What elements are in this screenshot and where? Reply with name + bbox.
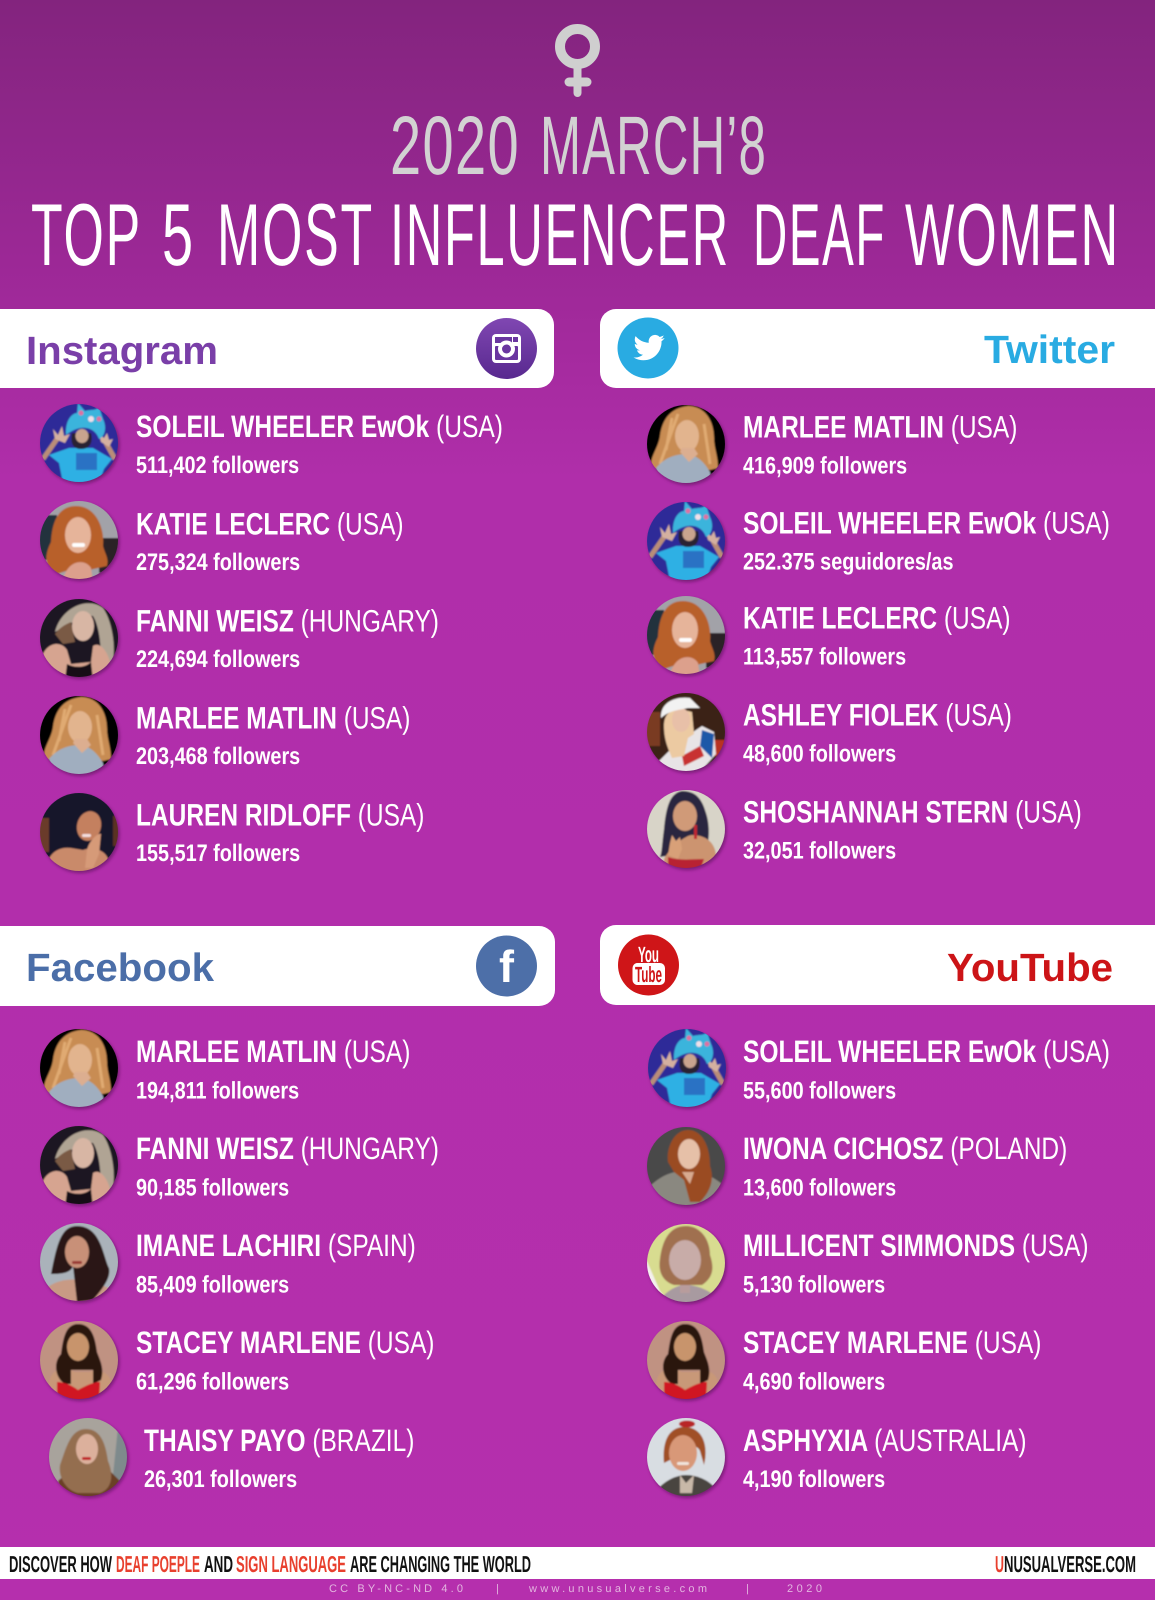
entry: Marlee Matlin: 194,811 followers	[136, 1078, 299, 1104]
Facebook banner	[0, 926, 555, 1006]
icon: YouTube	[618, 934, 679, 996]
entry: Lauren Ridloff	[39, 792, 424, 873]
entry: Marlee Matlin: MARLEE MATLIN (USA)	[136, 700, 410, 736]
entry: Fanni Weisz: 90,185 followers	[136, 1174, 289, 1202]
entry: Marlee Matlin	[646, 404, 1017, 486]
title: INFLUENCER	[390, 185, 730, 284]
credits line: |	[746, 1583, 749, 1595]
entry: Millicent Simmonds: 5,130 followers	[743, 1272, 885, 1298]
entry: Thaisy Payo: THAISY PAYO (BRAZIL)	[144, 1423, 414, 1458]
entry: Shoshannah Stern: SHOSHANNAH STERN (USA)	[743, 794, 1082, 830]
entry: Soleil Wheeler	[646, 501, 1110, 582]
entry: Katie Leclerc	[39, 500, 404, 582]
panel: YouTube	[600, 925, 1155, 1499]
entry: Marlee Matlin: MARLEE MATLIN (USA)	[743, 410, 1017, 444]
entry: Asphyxia	[646, 1417, 1027, 1499]
icon: YouTube: Tube	[635, 962, 662, 987]
entry: Thaisy Payo: 26,301 followers	[144, 1466, 297, 1493]
footer tagline: ARE CHANGING THE WORLD	[350, 1551, 531, 1577]
title: TOP	[31, 185, 142, 284]
Instagram heading: Instagram	[26, 329, 218, 373]
entry: Marlee Matlin: 203,468 followers	[136, 743, 300, 770]
entry: Shoshannah Stern: 32,051 followers	[743, 838, 896, 864]
title: MOST	[217, 185, 374, 284]
footer tagline: DEAF POEPLE	[116, 1551, 200, 1577]
entry: Katie Leclerc: KATIE LECLERC (USA)	[136, 506, 404, 542]
entry: Lauren Ridloff: LAUREN RIDLOFF (USA)	[136, 798, 424, 832]
entry: Iwona Cichosz: IWONA CICHOSZ (POLAND)	[743, 1131, 1067, 1166]
entry: Marlee Matlin: 416,909 followers	[743, 452, 907, 480]
entry: Ashley Fiolek	[646, 692, 1012, 773]
entry: Marlee Matlin	[39, 695, 410, 777]
icon: female symbol	[560, 29, 595, 93]
title: DEAF	[753, 185, 886, 284]
footer tagline: DISCOVER HOW	[9, 1551, 112, 1577]
title: 5	[162, 185, 195, 284]
panel: Facebook	[0, 926, 555, 1499]
icon: Facebook: f	[499, 941, 515, 992]
entry: Katie Leclerc	[646, 595, 1011, 677]
credits line: CC BY-NC-ND 4.0	[329, 1583, 463, 1595]
entry: Fanni Weisz: FANNI WEISZ (HUNGARY)	[136, 1131, 439, 1166]
entry: Fanni Weisz: FANNI WEISZ (HUNGARY)	[136, 604, 439, 638]
entry: Imane Lachiri: IMANE LACHIRI (SPAIN)	[136, 1228, 416, 1263]
credits line: 2020	[787, 1583, 822, 1595]
Twitter heading: Twitter	[984, 328, 1115, 372]
icon: Instagram	[476, 318, 537, 379]
Facebook heading: Facebook	[26, 946, 214, 990]
date heading: 2020	[390, 99, 520, 192]
footer tagline	[9, 1551, 531, 1577]
icon: Twitter	[618, 318, 678, 378]
entry: Marlee Matlin: MARLEE MATLIN (USA)	[136, 1034, 410, 1069]
credits line	[329, 1583, 822, 1595]
entry: Fanni Weisz: 224,694 followers	[136, 646, 300, 673]
footer site name: U	[995, 1551, 1004, 1577]
Twitter banner	[600, 309, 1155, 388]
entry: Soleil Wheeler: SOLEIL WHEELER EwOk (USA)	[743, 506, 1110, 540]
entry: Imane Lachiri: 85,409 followers	[136, 1272, 289, 1298]
entry: Iwona Cichosz	[646, 1126, 1067, 1208]
icon: YouTube: You	[638, 942, 659, 967]
credits line: www.unusualverse.com	[528, 1583, 707, 1595]
entry: Soleil Wheeler: SOLEIL WHEELER EwOk (USA)	[136, 409, 503, 444]
title	[31, 185, 1120, 284]
date heading: MARCH’8	[540, 99, 767, 192]
footer tagline: AND	[204, 1551, 233, 1577]
panel: Instagram	[0, 309, 554, 873]
footer strip	[0, 1547, 1155, 1579]
entry: Shoshannah Stern	[646, 789, 1082, 871]
entry: Katie Leclerc: 113,557 followers	[743, 644, 906, 670]
entry: Iwona Cichosz: 13,600 followers	[743, 1174, 896, 1202]
entry: Soleil Wheeler	[39, 403, 503, 484]
entry: Asphyxia: ASPHYXIA (AUSTRALIA)	[743, 1423, 1027, 1458]
entry: Fanni Weisz	[39, 1125, 439, 1207]
icon: Facebook	[476, 936, 537, 996]
entry: Soleil Wheeler: SOLEIL WHEELER EwOk (USA)	[743, 1034, 1110, 1069]
entry: Stacey Marlene	[39, 1320, 434, 1402]
entry: Soleil Wheeler: 55,600 followers	[743, 1078, 896, 1104]
entry: Stacey Marlene: STACEY MARLENE (USA)	[136, 1325, 434, 1360]
entry: Fanni Weisz	[39, 598, 439, 680]
entry: Ashley Fiolek: 48,600 followers	[743, 740, 896, 768]
YouTube banner	[600, 925, 1155, 1005]
entry: Stacey Marlene: STACEY MARLENE (USA)	[743, 1325, 1041, 1360]
entry: Asphyxia: 4,190 followers	[743, 1466, 885, 1493]
entry: Thaisy Payo	[48, 1417, 414, 1499]
entry: Imane Lachiri	[39, 1222, 416, 1304]
YouTube heading: YouTube	[947, 946, 1113, 990]
entry: Soleil Wheeler: 511,402 followers	[136, 452, 299, 479]
entry: Katie Leclerc: 275,324 followers	[136, 549, 300, 576]
footer tagline: SIGN LANGUAGE	[236, 1551, 346, 1577]
entry: Millicent Simmonds	[644, 1223, 1089, 1305]
entry: Millicent Simmonds: MILLICENT SIMMONDS (USA)	[743, 1228, 1089, 1263]
entry: Marlee Matlin	[39, 1028, 410, 1110]
entry: Soleil Wheeler	[647, 1028, 1110, 1109]
Instagram banner	[0, 309, 554, 388]
entry: Stacey Marlene: 4,690 followers	[743, 1368, 885, 1396]
date heading	[390, 99, 767, 192]
entry: Katie Leclerc: KATIE LECLERC (USA)	[743, 600, 1011, 636]
entry: Stacey Marlene: 61,296 followers	[136, 1368, 289, 1396]
entry: Stacey Marlene	[646, 1320, 1041, 1402]
entry: Soleil Wheeler: 252.375 seguidores/as	[743, 548, 953, 576]
panel: Twitter	[600, 309, 1155, 871]
credits line: |	[496, 1583, 499, 1595]
entry: Ashley Fiolek: ASHLEY FIOLEK (USA)	[743, 698, 1012, 732]
entry: Lauren Ridloff: 155,517 followers	[136, 840, 300, 867]
